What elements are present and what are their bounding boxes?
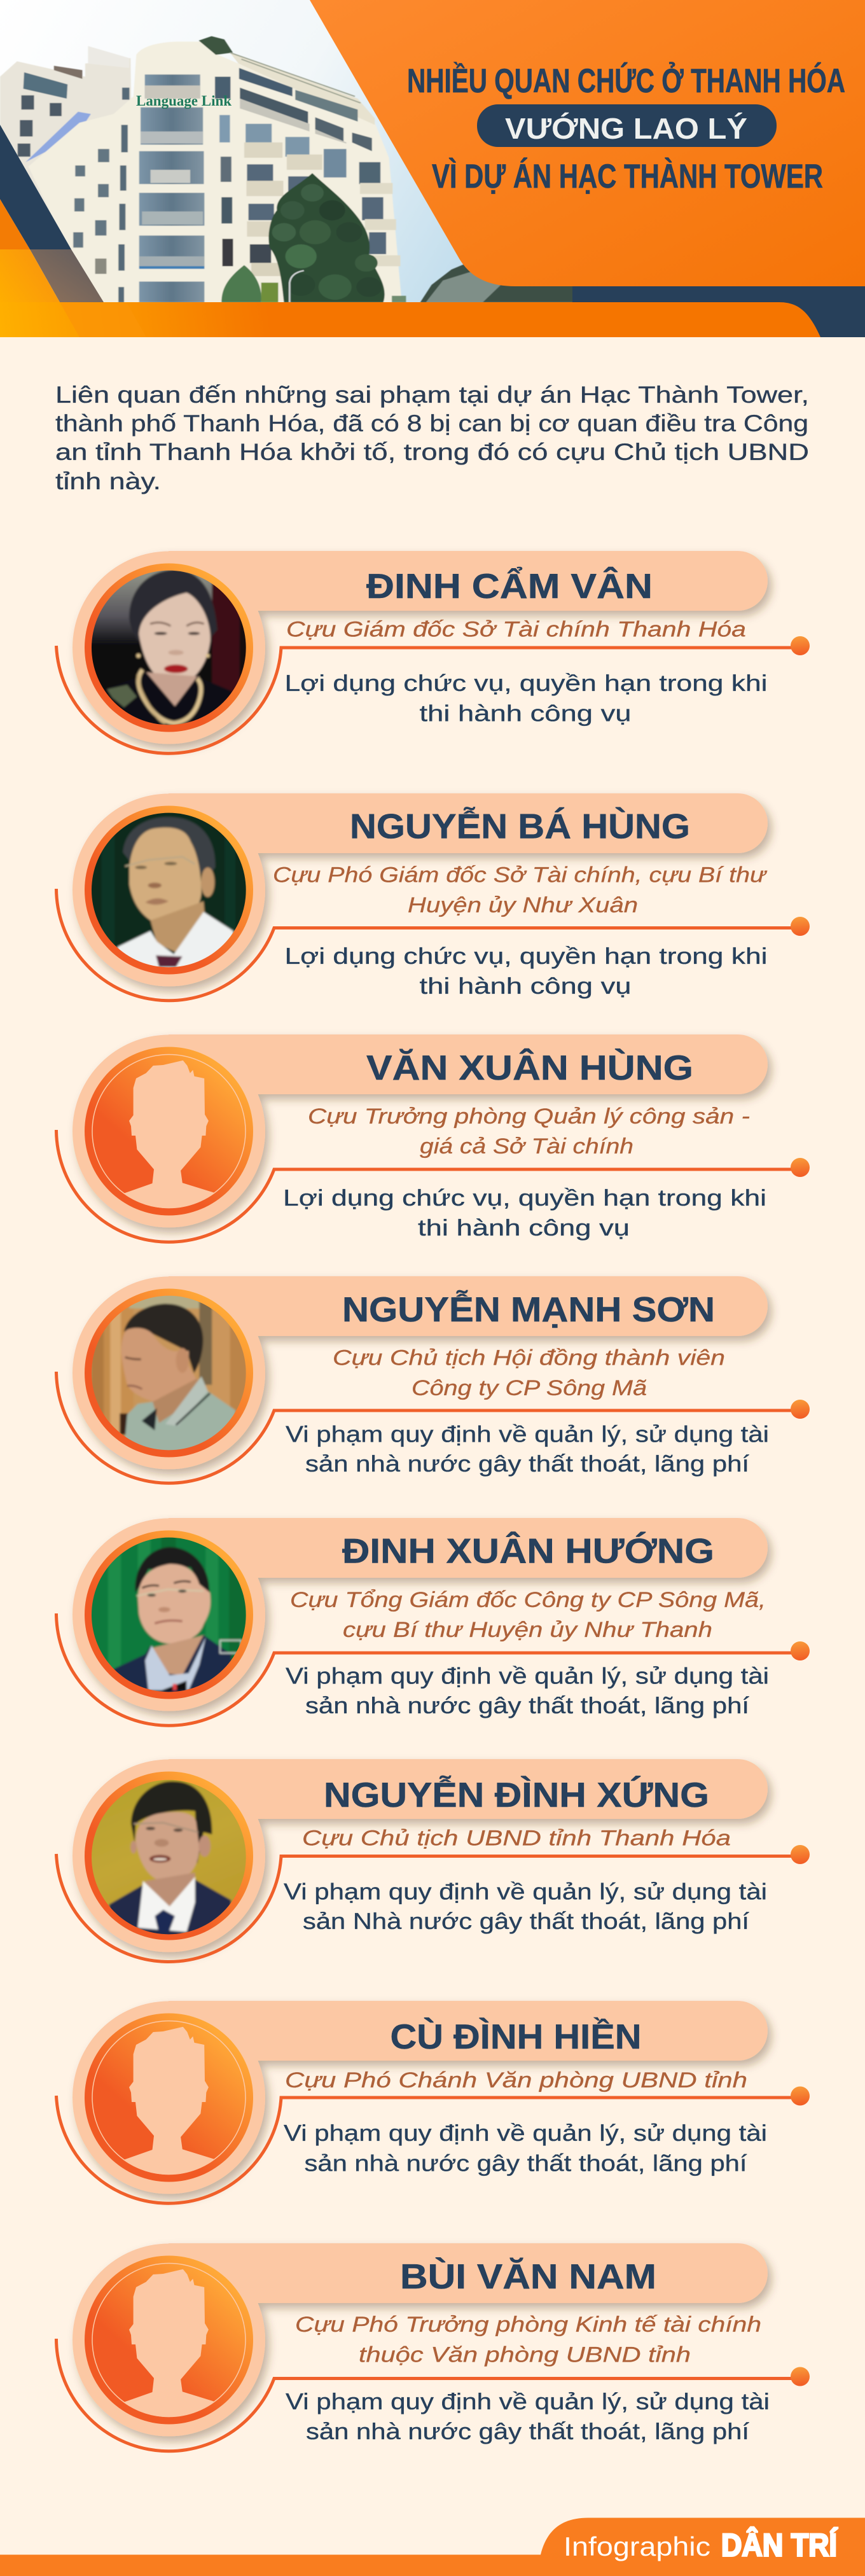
position: Công ty CP Sông Mã	[412, 1376, 647, 1400]
connector arc and rule	[56, 1613, 795, 1725]
building photograph	[0, 0, 585, 302]
avatar ring	[85, 1047, 253, 1215]
footer band and credit	[0, 2518, 865, 2576]
publisher logo text: DÂN TRÍ	[721, 2527, 838, 2563]
footer shape	[0, 2518, 865, 2576]
charge: sản nhà nước gây thất thoát, lãng phí	[305, 1451, 749, 1477]
connector arc and rule	[56, 889, 795, 1001]
name pill and avatar backing	[73, 1518, 768, 1711]
charge	[284, 1878, 767, 1934]
charge	[286, 1663, 769, 1718]
charge	[286, 1421, 769, 1477]
name: CÙ ĐÌNH HIỀN	[391, 2017, 641, 2056]
navy backing shape	[572, 280, 865, 337]
position: Cựu Chủ tịch Hội đồng thành viên	[333, 1346, 725, 1370]
position	[333, 1346, 725, 1400]
panel: Nguyễn Mạnh Sơn	[56, 1276, 810, 1483]
charge: thi hành công vụ	[420, 973, 631, 999]
charge	[285, 670, 767, 727]
charge: Vi phạm quy định về quản lý, sử dụng tài	[286, 1421, 769, 1447]
charge	[285, 943, 767, 999]
avatar ring	[85, 564, 253, 732]
rule end dot	[791, 917, 810, 936]
title highlight pill	[477, 104, 777, 147]
position: thuộc Văn phòng UBND tỉnh	[359, 2343, 691, 2367]
faded diagonal	[30, 249, 104, 302]
rule end dot	[791, 1400, 810, 1419]
position: Cựu Giám đốc Sở Tài chính Thanh Hóa	[286, 617, 746, 641]
position	[295, 2313, 761, 2367]
charge: sản nhà nước gây thất thoát, lãng phí	[304, 2150, 747, 2176]
position: Cựu Phó Chánh Văn phòng UBND tỉnh	[285, 2068, 747, 2092]
intro text: tỉnh này.	[55, 468, 161, 494]
charge: thi hành công vụ	[420, 700, 631, 727]
name pill and avatar backing	[73, 2243, 768, 2437]
rule end dot	[791, 636, 810, 655]
connector arc and rule	[56, 1854, 795, 1962]
rule end dot	[791, 2087, 810, 2106]
name: BÙI VĂN NAM	[400, 2257, 656, 2296]
charge: sản Nhà nước gây thất thoát, lãng phí	[303, 1908, 749, 1934]
orange title panel	[310, 0, 865, 286]
position: Cựu Phó Giám đốc Sở Tài chính, cựu Bí thư	[273, 863, 768, 887]
charge: Vi phạm quy định về quản lý, sử dụng tài	[286, 2388, 770, 2414]
panel: Văn Xuân Hùng	[56, 1034, 810, 1242]
portrait: Nguyễn Mạnh Sơn	[89, 1293, 248, 1452]
position: Cựu Trưởng phòng Quản lý công sản -	[308, 1104, 750, 1129]
panel: Đinh Xuân Hướng	[56, 1518, 810, 1725]
title highlight pill: VƯỚNG LAO LÝ	[505, 112, 747, 145]
avatar ring	[85, 1531, 253, 1699]
avatar ring	[85, 1771, 253, 1940]
amber facet	[0, 249, 60, 302]
rule end dot	[791, 1158, 810, 1177]
name: NGUYỄN MẠNH SƠN	[342, 1290, 715, 1329]
avatar ring	[85, 1289, 253, 1457]
connector arc and rule	[56, 646, 795, 753]
rule end dot	[791, 1845, 810, 1864]
name: NGUYỄN BÁ HÙNG	[350, 807, 690, 846]
name: VĂN XUÂN HÙNG	[366, 1048, 693, 1087]
name: ĐINH CẨM VÂN	[366, 566, 653, 606]
charge	[283, 1185, 766, 1241]
intro text: an tỉnh Thanh Hóa khởi tố, trong đó có cựu Chủ tịch UBND	[55, 439, 809, 465]
avatar ring	[85, 2013, 253, 2182]
charge: Lợi dụng chức vụ, quyền hạn trong khi	[285, 670, 767, 696]
panel: Nguyễn Đình Xứng	[56, 1759, 810, 1962]
position	[273, 863, 768, 917]
position	[308, 1104, 750, 1159]
portrait: Nguyễn Đình Xứng	[89, 1777, 248, 1939]
name: NGUYỄN ĐÌNH XỨNG	[324, 1775, 709, 1814]
portrait: Đinh Xuân Hướng	[89, 1535, 248, 1694]
panel: Đinh Cẩm Vân	[56, 551, 810, 753]
charge: Vi phạm quy định về quản lý, sử dụng tài	[284, 1878, 767, 1905]
rule end dot	[791, 1641, 810, 1660]
panel: Nguyễn Bá Hùng	[56, 793, 810, 1001]
position: Huyện ủy Như Xuân	[408, 893, 638, 917]
navy diagonal	[0, 125, 71, 249]
name: ĐINH XUÂN HƯỚNG	[342, 1531, 714, 1570]
position: Cựu Tổng Giám đốc Công ty CP Sông Mã,	[290, 1588, 766, 1612]
charge: Lợi dụng chức vụ, quyền hạn trong khi	[285, 943, 767, 969]
charge: Vi phạm quy định về quản lý, sử dụng tài	[284, 2120, 767, 2146]
rule end dot	[791, 2367, 810, 2386]
name pill and avatar backing	[73, 1034, 768, 1228]
portrait: Nguyễn Bá Hùng	[89, 810, 248, 971]
position: Cựu Chủ tịch UBND tỉnh Thanh Hóa	[302, 1826, 731, 1850]
charge: sản nhà nước gây thất thoát, lãng phí	[306, 2418, 749, 2444]
connector arc and rule	[56, 2339, 795, 2451]
intro text: thành phố Thanh Hóa, đã có 8 bị can bị cơ quan điều tra Công	[55, 410, 808, 436]
charge: sản nhà nước gây thất thoát, lãng phí	[305, 1692, 749, 1718]
name pill and avatar backing	[73, 551, 768, 744]
name pill and avatar backing	[73, 1759, 768, 1952]
panel: Cù Đình Hiền	[56, 2001, 810, 2203]
intro text: Liên quan đến những sai phạm tại dự án Hạc Thành Tower,	[55, 382, 809, 408]
position: cựu Bí thư Huyện ủy Như Thanh	[343, 1618, 712, 1642]
position	[290, 1588, 766, 1642]
charge: Lợi dụng chức vụ, quyền hạn trong khi	[283, 1185, 766, 1211]
charge	[286, 2388, 770, 2444]
dark orange triangle	[0, 199, 30, 249]
portrait: Đinh Cẩm Vân	[89, 568, 250, 727]
charge	[284, 2120, 767, 2176]
bottom orange band	[0, 302, 820, 337]
panel: Bùi Văn Nam	[56, 2243, 810, 2451]
charge: thi hành công vụ	[418, 1215, 630, 1241]
position: giá cả Sở Tài chính	[420, 1134, 633, 1159]
icon: anonymous silhouette	[92, 1055, 246, 1208]
intro text	[55, 382, 809, 494]
header banner	[0, 0, 865, 337]
avatar ring	[85, 805, 253, 975]
credit label: Infographic	[564, 2531, 710, 2561]
charge: Vi phạm quy định về quản lý, sử dụng tài	[286, 1663, 769, 1688]
building sign: Language Link	[136, 93, 232, 109]
avatar ring	[85, 2256, 253, 2424]
connector arc and rule	[56, 2096, 795, 2203]
connector arc and rule	[56, 1130, 795, 1242]
name pill and avatar backing	[73, 2001, 768, 2194]
name pill and avatar backing	[73, 1276, 768, 1470]
lighter band facet	[60, 302, 146, 337]
connector arc and rule	[56, 1372, 795, 1483]
icon: anonymous silhouette	[92, 2021, 246, 2175]
name pill and avatar backing	[73, 793, 768, 986]
position: Cựu Phó Trưởng phòng Kinh tế tài chính	[295, 2313, 761, 2337]
icon: anonymous silhouette	[92, 2264, 246, 2417]
